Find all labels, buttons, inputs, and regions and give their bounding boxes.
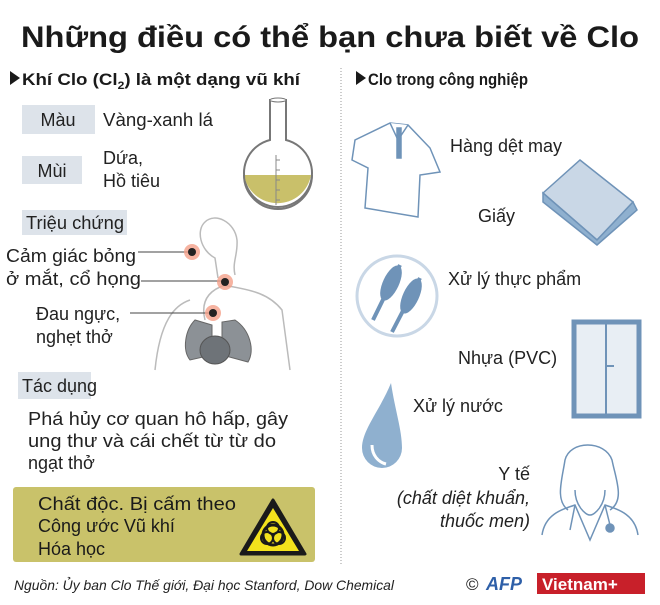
text: food processing: Xử lý thực phẩm [448,269,581,289]
smell label: Hồ tiêu [103,171,160,191]
left heading: Khí Clo (Cl [22,70,109,89]
symptom: chest pain: Đau ngực, [36,304,120,324]
smell label: Mùi [37,161,67,181]
callout: banned [13,487,315,562]
body illustration [155,218,290,370]
symptoms label: Triệu chứng [26,213,124,233]
symptom: burning eyes/throat: ở mắt, cổ họng [6,268,141,289]
symptom: burning eyes/throat [6,244,233,290]
left heading [10,70,301,92]
effects label: Tác dụng [22,376,97,396]
right heading: Clo trong công nghiệp [368,70,528,89]
callout: banned: Công ước Vũ khí [38,516,175,536]
icon: flask [244,98,312,209]
footer source: Nguồn: Ủy ban Clo Thế giới, Đại học Stanford, Dow Chemical [14,576,395,593]
logo: AFP [485,574,523,594]
callout: banned: Hóa học [38,539,105,559]
logo [466,573,645,594]
effects text: Phá hủy cơ quan hô hấp, gây [28,409,288,429]
effects text: ngạt thở [28,453,95,473]
text: paper: Giấy [478,206,515,226]
color label: Vàng-xanh lá [103,110,214,130]
logo: Vietnam+ [542,575,618,594]
icon: wheat [357,256,437,336]
symptom: chest pain: nghẹt thở [36,327,113,347]
smell label: Dứa, [103,148,143,168]
effects text: ung thư và cái chết từ từ do [28,431,276,451]
text: medical [397,464,530,531]
text: textiles: Hàng dệt may [450,136,562,156]
icon: water drop [362,383,402,468]
symptom: burning eyes/throat: Cảm giác bỏng [6,246,136,266]
text: medical: Y tế [498,464,530,484]
icon: shirt [352,123,440,217]
symptom: chest pain [36,304,221,347]
left heading: 2 [118,80,124,92]
text: water treatment: Xử lý nước [413,396,503,416]
smell label [22,148,160,191]
logo: © [466,575,479,594]
text: medical: thuốc men) [440,511,530,531]
text: medical: (chất diệt khuẩn, [397,488,530,508]
icon: book [543,160,637,245]
effects text [28,409,288,473]
title: Những điều có thể bạn chưa biết về Clo [21,21,639,54]
icon: doctor [542,445,638,540]
color label [22,105,214,134]
icon: biohazard [241,500,305,554]
left heading: ) là một dạng vũ khí [124,70,301,89]
text: PVC: Nhựa (PVC) [458,348,557,368]
color label: Màu [40,110,76,130]
callout: banned: Chất độc. Bị cấm theo [38,494,236,514]
icon: window [574,322,639,416]
